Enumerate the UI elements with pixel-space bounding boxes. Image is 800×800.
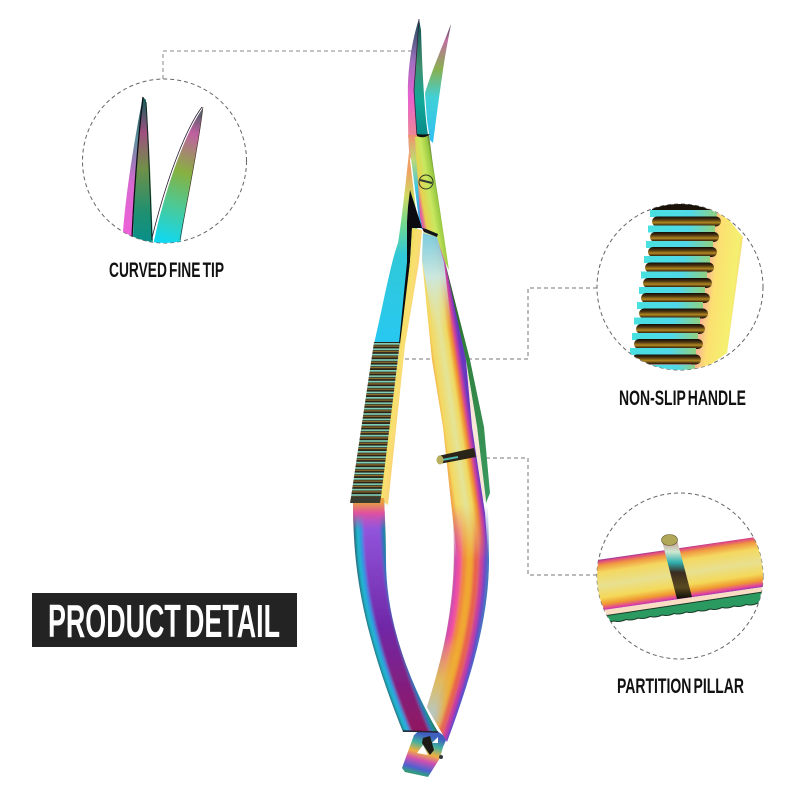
shaft collar <box>417 134 430 137</box>
right arm cream edge <box>466 360 486 500</box>
leader line: curved fine tip <box>163 51 412 79</box>
lower right arm <box>427 508 489 742</box>
left arm upper <box>374 152 418 344</box>
badge: product detail: PRODUCT DETAIL <box>48 595 280 647</box>
detail circle: curved fine tip <box>82 79 246 245</box>
detail circle: partition pillar <box>590 493 770 659</box>
label: curved fine tip: CURVED FINE TIP <box>109 259 224 282</box>
scissors illustration <box>350 19 490 777</box>
pillar <box>662 534 692 599</box>
yellow strip of left arm <box>380 228 422 505</box>
right arm main <box>422 232 489 565</box>
leader line: partition pillar <box>475 458 597 575</box>
badge: product detail <box>32 593 297 647</box>
leader line: non-slip handle <box>398 288 597 359</box>
right arm green edge <box>442 262 490 503</box>
blade tips <box>123 97 203 245</box>
cyan cross strip <box>408 135 425 230</box>
handle section <box>597 534 763 622</box>
black gap <box>399 190 422 344</box>
grip end cap <box>350 497 381 503</box>
screw <box>419 175 433 189</box>
ridged grip <box>351 342 400 497</box>
left blade <box>408 19 428 160</box>
bottom loop <box>402 730 447 777</box>
lower left arm <box>353 498 438 732</box>
partition pillar <box>436 448 476 464</box>
dark joint notch <box>422 228 438 237</box>
pale highlight of right arm <box>422 233 452 330</box>
right blade <box>425 24 451 143</box>
handle ridges <box>630 203 743 372</box>
detail circle: non-slip handle <box>597 203 763 372</box>
central shaft <box>415 135 449 270</box>
lower left arm tip edge <box>403 731 438 732</box>
